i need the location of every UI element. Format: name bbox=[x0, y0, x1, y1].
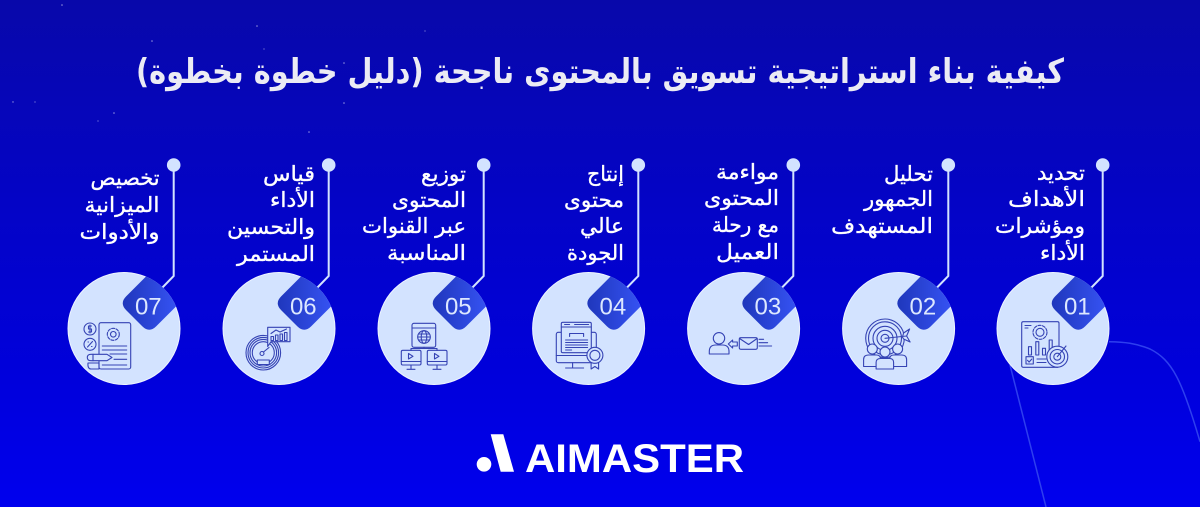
label 04: إنتاج bbox=[587, 162, 624, 187]
connector 04 bbox=[626, 158, 645, 289]
label 02 bbox=[831, 162, 933, 238]
label 03: مواءمة bbox=[716, 160, 779, 184]
connector 05 bbox=[471, 158, 491, 289]
label 07: والأدوات bbox=[80, 219, 160, 244]
step 02 bbox=[831, 158, 955, 384]
label 05 bbox=[362, 162, 466, 265]
connector 07 bbox=[161, 158, 180, 289]
label 06 bbox=[227, 162, 315, 266]
circle 02 bbox=[843, 272, 955, 384]
icon: report with target bbox=[1022, 322, 1068, 367]
label 03: العميل bbox=[716, 240, 779, 264]
label 06: والتحسين bbox=[227, 215, 315, 239]
circle 01: 01 bbox=[1064, 294, 1091, 320]
circle 06 bbox=[223, 272, 335, 384]
circle 03: 03 bbox=[755, 294, 781, 320]
step 01 bbox=[995, 158, 1109, 384]
label 02: المستهدف bbox=[831, 214, 933, 238]
connector 03 bbox=[781, 158, 800, 289]
icon: web network to screens bbox=[401, 323, 447, 369]
circle 03 bbox=[688, 272, 800, 384]
label 03: المحتوى bbox=[704, 186, 779, 210]
connector 06 bbox=[316, 158, 336, 289]
circle 02: 02 bbox=[910, 294, 936, 320]
icon: budget document and pencil bbox=[84, 323, 131, 369]
label 01: ومؤشرات bbox=[995, 214, 1085, 238]
label 05: عبر القنوات bbox=[362, 214, 466, 238]
circle 07: 07 bbox=[135, 294, 162, 320]
label 02: الجمهور bbox=[863, 187, 933, 211]
icon: monitor with certificate bbox=[556, 322, 603, 369]
step 07 bbox=[68, 158, 180, 384]
logo wordmark: AIMASTER bbox=[525, 437, 744, 481]
logo mark bbox=[477, 434, 514, 472]
label 07: تخصيص bbox=[90, 166, 160, 190]
label 04 bbox=[564, 162, 624, 265]
label 03 bbox=[704, 160, 779, 264]
label 06: قياس bbox=[263, 162, 315, 186]
label 07: الميزانية bbox=[84, 193, 160, 217]
step 05 bbox=[362, 158, 491, 384]
circle 05 bbox=[378, 272, 490, 384]
label 06: الأداء bbox=[270, 187, 315, 212]
circle 04: 04 bbox=[600, 294, 626, 320]
circle 04 bbox=[533, 272, 645, 384]
icon: person and envelope bbox=[709, 333, 772, 354]
label 04: عالي bbox=[580, 214, 624, 238]
label 01: الأداء bbox=[1040, 240, 1085, 265]
label 05: توزيع bbox=[421, 162, 466, 186]
label 07 bbox=[80, 166, 160, 244]
label 02: تحليل bbox=[884, 162, 933, 186]
step 04 bbox=[533, 158, 645, 384]
connector 02 bbox=[936, 158, 955, 289]
label 06: المستمر bbox=[236, 242, 315, 266]
icon: speedometer with chart bbox=[246, 327, 290, 370]
background curve lines bbox=[1010, 342, 1200, 507]
logo: AIMASTER bbox=[477, 434, 744, 481]
label 05: المحتوى bbox=[392, 188, 466, 212]
step 06 bbox=[223, 158, 336, 384]
label 05: المناسبة bbox=[387, 241, 466, 265]
label 01: الأهداف bbox=[1008, 186, 1085, 211]
label 04: الجودة bbox=[567, 241, 624, 265]
label 01 bbox=[995, 161, 1085, 265]
icon: target and audience bbox=[864, 319, 910, 369]
circle 05: 05 bbox=[445, 294, 472, 320]
connector 01 bbox=[1090, 158, 1109, 289]
label 04: محتوى bbox=[564, 188, 624, 212]
step 03 bbox=[688, 158, 800, 384]
label 01: تحديد bbox=[1037, 161, 1085, 185]
circle 06: 06 bbox=[290, 294, 317, 320]
circle 07 bbox=[68, 272, 180, 384]
circle 01 bbox=[997, 272, 1109, 384]
label 03: مع رحلة bbox=[712, 213, 779, 237]
